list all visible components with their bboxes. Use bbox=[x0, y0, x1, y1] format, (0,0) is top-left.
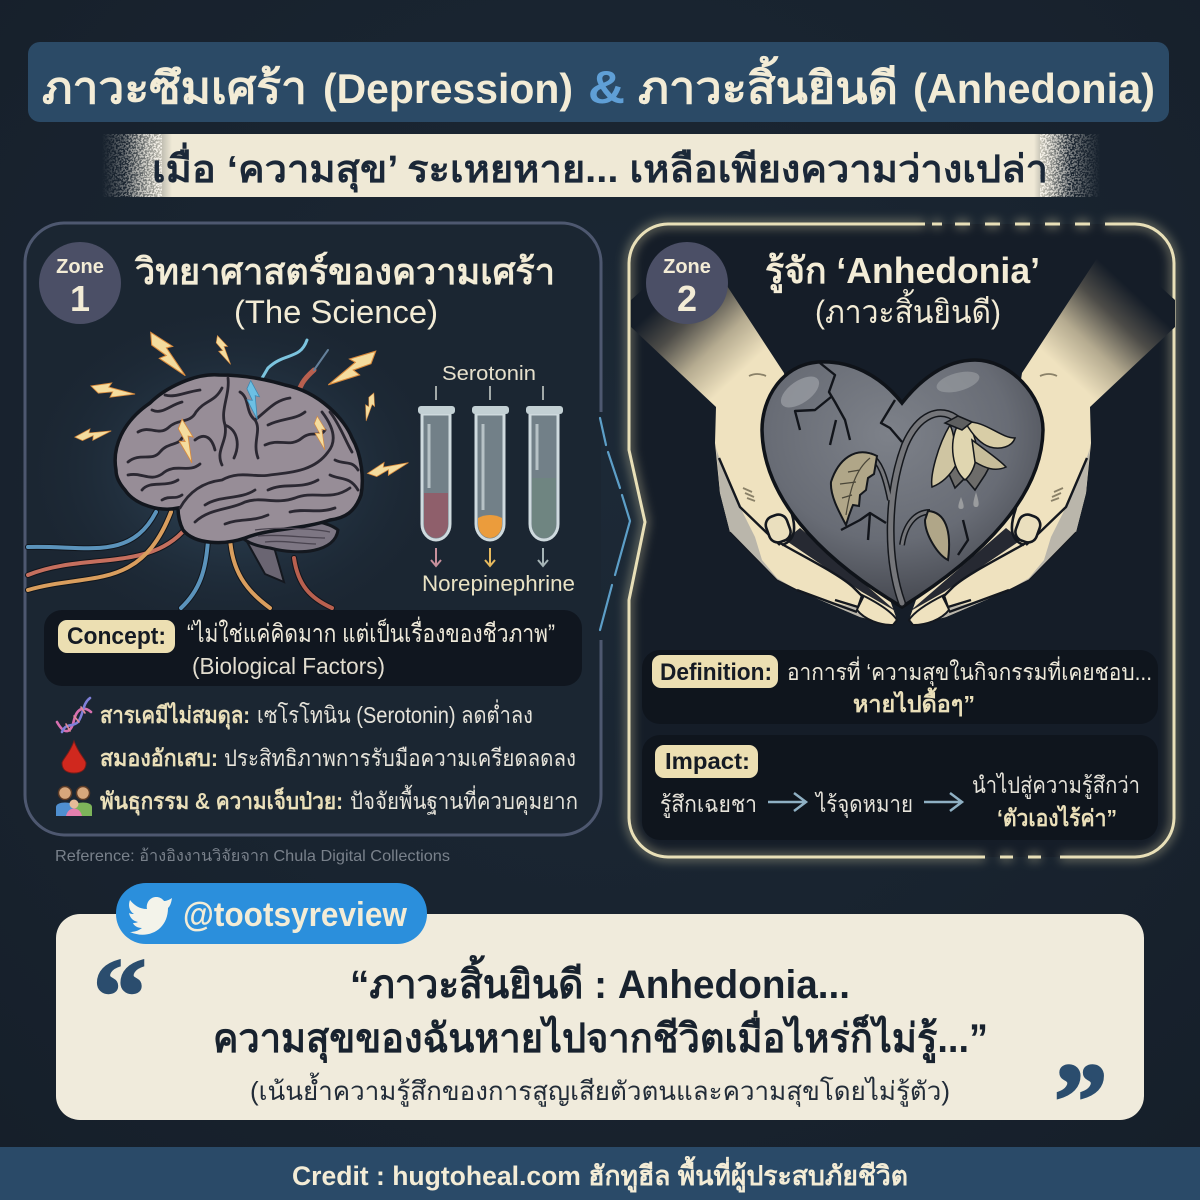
concept box: (Biological Factors) bbox=[192, 653, 385, 679]
subtitle band: เมื่อ ‘ความสุข’ ระเหยหาย... เหลือเพียงความว่างเปล่า bbox=[152, 142, 1048, 193]
nerve wires bbox=[28, 340, 332, 608]
icon: blood drop bbox=[62, 741, 86, 773]
arrow bbox=[768, 793, 806, 811]
label: norepinephrine: Norepinephrine bbox=[422, 571, 575, 596]
title bar bbox=[28, 42, 1169, 122]
title bar: & bbox=[588, 61, 625, 113]
title bar: ภาวะซึมเศร้า bbox=[42, 64, 307, 113]
quote text bbox=[213, 955, 988, 1107]
zone 1 badge: 1 bbox=[70, 278, 90, 319]
panel: zone 1 science bbox=[20, 223, 601, 835]
opening quote mark: “ bbox=[93, 938, 146, 1056]
quote text: “ภาวะสิ้นยินดี : Anhedonia... bbox=[350, 955, 850, 1007]
closing quote mark: ” bbox=[1054, 1043, 1108, 1161]
quote text: (เน้นย้ำความรู้สึกของการสูญเสียตัวตนและความสุขโดยไม่รู้ตัว) bbox=[250, 1072, 950, 1107]
impact box: ไร้จุดหมาย bbox=[814, 791, 913, 818]
arrow bbox=[924, 793, 962, 811]
twitter handle pill: @tootsyreview bbox=[183, 896, 408, 934]
definition box: หายไปดื้อๆ” bbox=[853, 687, 975, 717]
definition box: อาการที่ ‘ความสุขในกิจกรรมที่เคยชอบ... bbox=[787, 656, 1152, 686]
icon: brain bbox=[115, 375, 362, 582]
row: chemical imbalance: สารเคมีไม่สมดุล: bbox=[100, 701, 250, 730]
left hand bbox=[631, 240, 897, 625]
subtitle band bbox=[102, 134, 1100, 197]
label: serotonin: Serotonin bbox=[442, 363, 536, 385]
zone 2 badge: Zone bbox=[663, 256, 711, 278]
impact box bbox=[642, 735, 1158, 840]
row: genetics and illness: ปัจจัยพื้นฐานที่ควบคุมยาก bbox=[350, 785, 578, 815]
zone 1 badge: Zone bbox=[56, 256, 104, 278]
definition box: Definition: bbox=[660, 659, 772, 686]
concept box bbox=[44, 610, 582, 686]
zone 1 heading: วิทยาศาสตร์ของความเศร้า bbox=[134, 251, 555, 292]
quote text: ความสุขของฉันหายไปจากชีวิตเมื่อไหร่ก็ไม่รู้...” bbox=[213, 1010, 988, 1064]
impact box: รู้สึกเฉยชา bbox=[660, 791, 757, 818]
zone 2 badge bbox=[646, 242, 728, 324]
panel: zone 2 anhedonia bbox=[629, 224, 1175, 857]
zone 2 badge: 2 bbox=[677, 278, 697, 319]
right hand bbox=[909, 240, 1175, 625]
impact box: นำไปสู่ความรู้สึกว่า bbox=[972, 772, 1140, 799]
row: chemical imbalance bbox=[100, 699, 533, 730]
zone 2 heading: รู้จัก ‘Anhedonia’ bbox=[765, 250, 1040, 294]
concept box: “ไม่ใช่แค่คิดมาก แต่เป็นเรื่องของชีวภาพ” bbox=[187, 616, 555, 648]
row: chemical imbalance: เซโรโทนิน (Serotonin) ลดต่ำลง bbox=[257, 699, 533, 728]
stone heart bbox=[762, 360, 1043, 607]
impact box: Impact: bbox=[665, 748, 750, 774]
footer credit: Credit : hugtoheal.com ฮักทูฮีล พื้นที่ผู้ประสบภัยชีวิต bbox=[292, 1155, 908, 1193]
zone 2 heading bbox=[765, 250, 1040, 330]
row: brain inflammation: สมองอักเสบ: bbox=[100, 745, 218, 771]
row: genetics and illness: พันธุกรรม & ความเจ็บป่วย: bbox=[100, 786, 343, 816]
concept box: Concept: bbox=[67, 623, 166, 650]
reference note: Reference: อ้างอิงงานวิจัยจาก Chula Digital Collections bbox=[55, 847, 450, 865]
zone 1 heading: (The Science) bbox=[234, 294, 438, 330]
title bar: ภาวะสิ้นยินดี bbox=[638, 55, 898, 113]
impact box: ‘ตัวเองไร้ค่า” bbox=[997, 804, 1117, 831]
icon: bird bbox=[129, 897, 172, 935]
title bar: (Anhedonia) bbox=[913, 65, 1155, 112]
zone 2 heading: (ภาวะสิ้นยินดี) bbox=[815, 289, 1001, 330]
test tubes bbox=[418, 386, 563, 566]
icon: family bbox=[56, 786, 92, 816]
definition box bbox=[642, 650, 1158, 724]
icon: dna bbox=[57, 698, 91, 732]
row: brain inflammation: ประสิทธิภาพการรับมือความเครียดลดลง bbox=[224, 745, 576, 771]
icon: lightning bolts bbox=[74, 327, 408, 482]
connector: blue electric chevron bbox=[600, 418, 630, 630]
twitter handle pill bbox=[116, 883, 427, 944]
wilted flower bbox=[831, 413, 1015, 603]
zone 1 heading bbox=[134, 251, 555, 330]
row: genetics and illness bbox=[100, 785, 578, 816]
quote card bbox=[56, 914, 1144, 1161]
title bar: (Depression) bbox=[323, 65, 573, 112]
zone 1 badge bbox=[39, 242, 121, 324]
footer credit bbox=[0, 1147, 1200, 1200]
row: brain inflammation bbox=[100, 745, 576, 771]
